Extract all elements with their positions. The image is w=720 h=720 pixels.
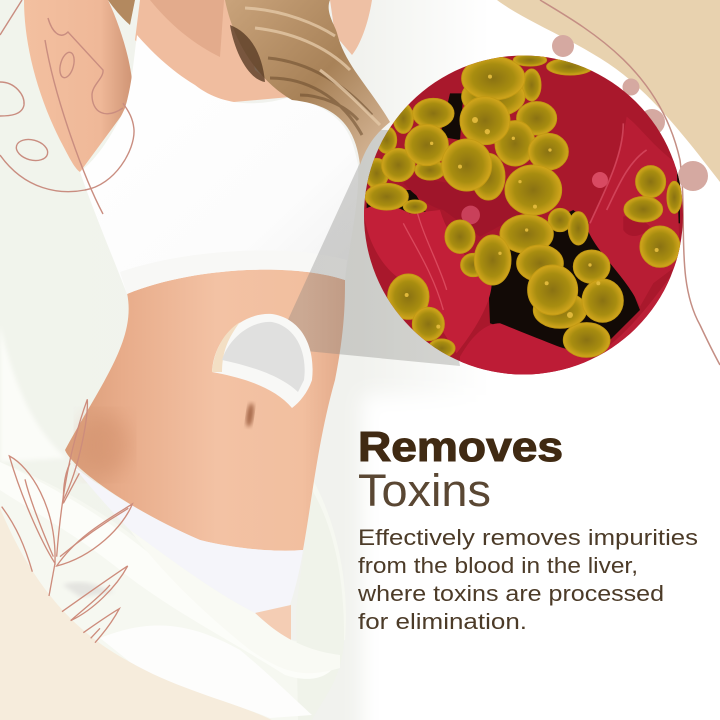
heading: Removes Toxins [358,423,563,516]
translucent zoom cone [275,130,460,366]
magnified bacteria circle [360,50,690,383]
description text: Effectively removes impurities [358,525,698,550]
medical patch [212,314,313,408]
heading: Removes Toxins: Toxins [358,465,491,516]
decorative dots [552,35,708,191]
white underwear [66,458,303,641]
midriff [65,268,345,551]
beige corner shape: top right [497,0,720,182]
decorative line: right curve [540,0,720,365]
draped fabric [0,325,346,720]
hair [108,0,390,165]
botanical line art: top left [0,0,134,214]
small red spheres [461,206,480,224]
description text: where toxins are processed [357,581,664,606]
red tissue [363,117,680,383]
description text: for elimination. [358,609,527,634]
description text: from the blood in the liver, [358,553,638,578]
fabric swoop over hip [130,530,340,673]
heading: Removes Toxins: Removes [358,423,563,470]
white crop top [80,35,358,294]
dark gaps [367,93,680,357]
description text [357,525,698,634]
raised arms and chest skin [24,0,372,172]
background fade to white, lower right [362,395,720,720]
abdominal shading [79,413,131,477]
navel [245,403,255,427]
botanical line art: bottom left leaves [2,399,132,643]
yellow bacteria cells [365,54,682,358]
cream corner shape: bottom left [0,508,272,720]
cell surface speckles [405,75,659,329]
